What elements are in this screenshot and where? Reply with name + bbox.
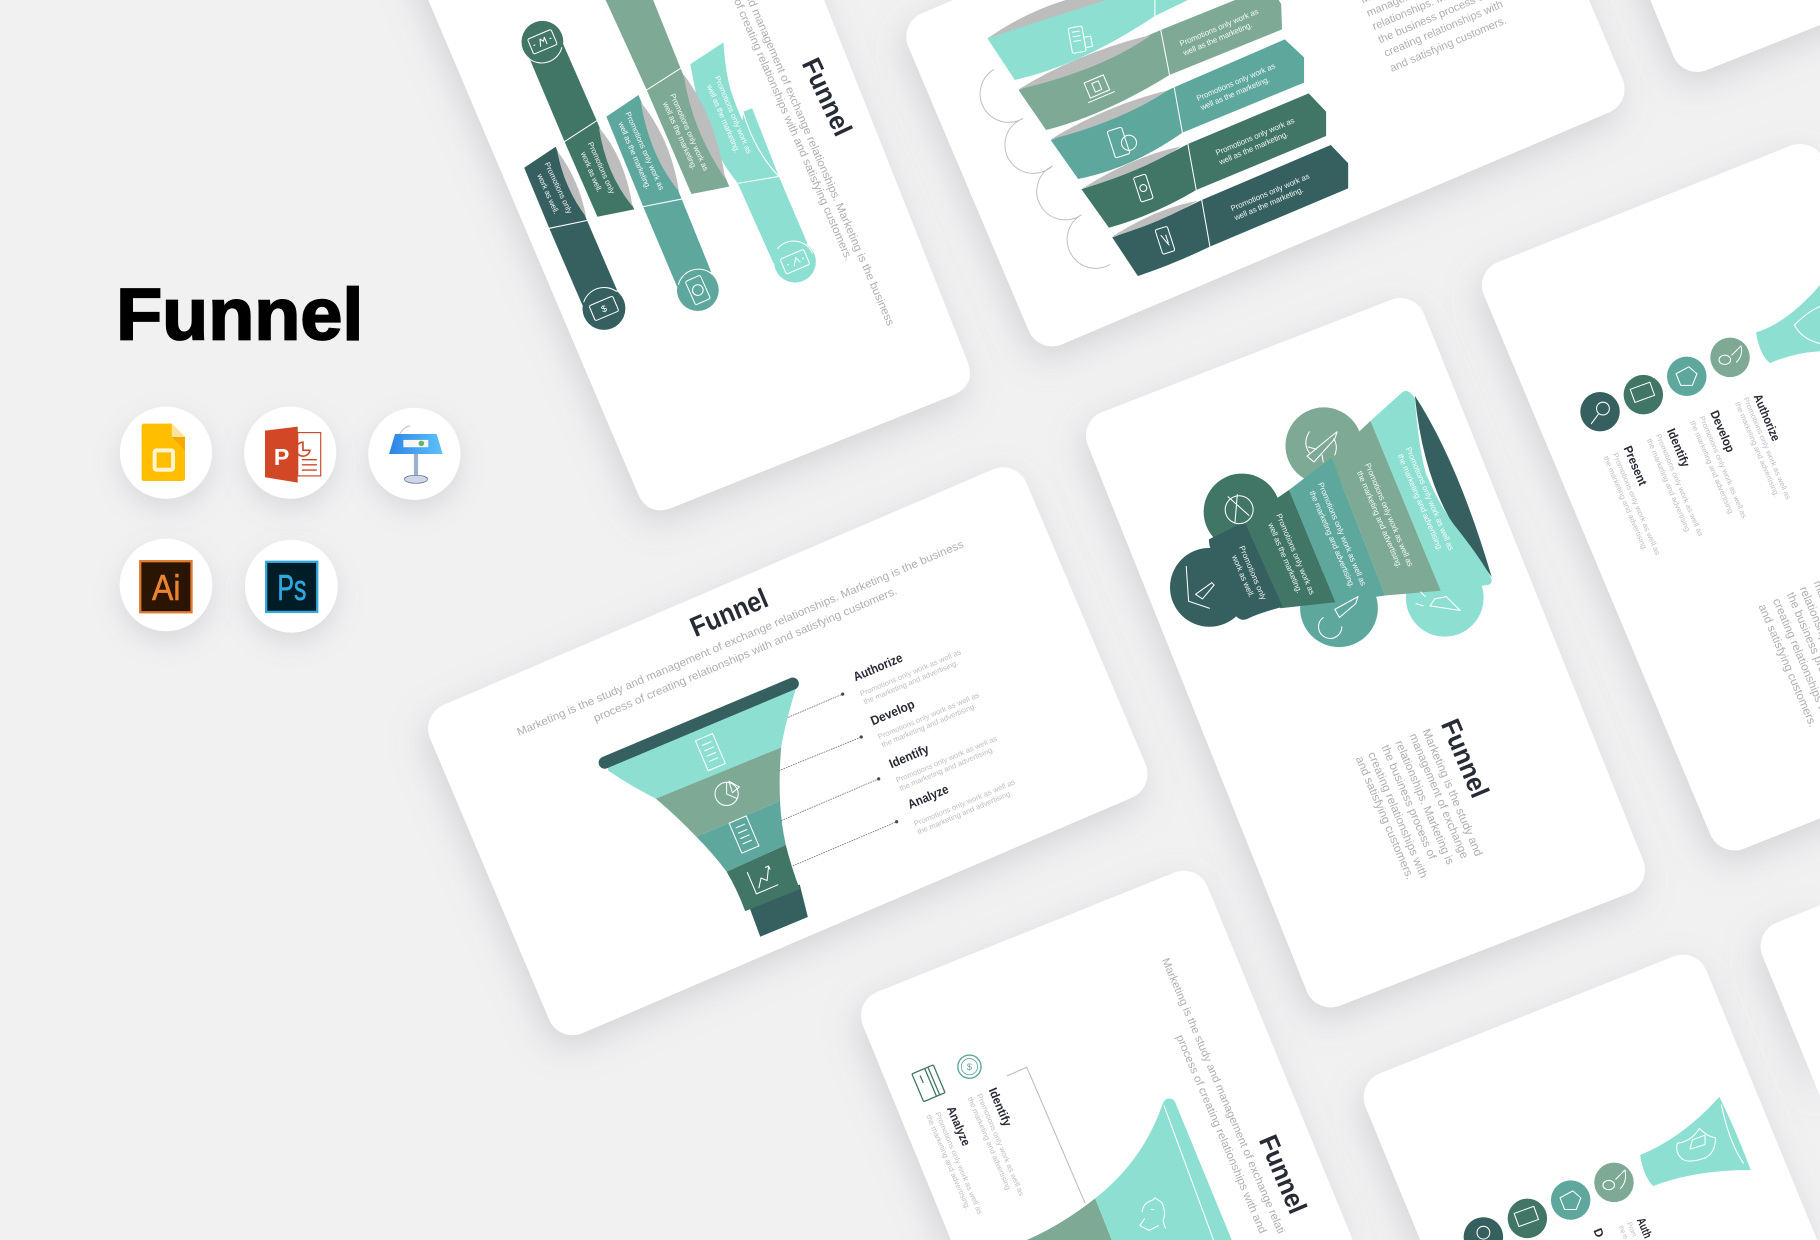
icon: receipt [729, 816, 759, 853]
body text: process of creating relationships with and [1173, 1033, 1268, 1235]
label: Analyze: the marketing and advertising. [916, 788, 1014, 836]
icon: credit card [912, 1065, 945, 1102]
label: Develop: Develop [868, 696, 917, 728]
step circles [1464, 1163, 1634, 1240]
funnel stem [749, 884, 808, 937]
band captions: the marketing and advertising. [1308, 489, 1357, 589]
ribbon captions: Promotions only work as [1214, 116, 1296, 157]
circle: sage [1285, 407, 1362, 484]
body text [1353, 727, 1485, 881]
label: Analyze: Promotions only work as well as [933, 1111, 985, 1216]
band captions: Promotions only work as well as [1404, 446, 1456, 552]
label: Identify: Promotions only work as well as [894, 734, 999, 785]
strip captions: Promotions only work as [668, 92, 710, 172]
label: Identify: the marketing and advertising. [898, 745, 996, 793]
body text: creating relationships with [1365, 750, 1430, 880]
ribbon: darkest [1112, 145, 1348, 276]
card background [898, 0, 1632, 354]
icon: Photoshop [245, 540, 338, 633]
band captions [1230, 446, 1456, 601]
icon: growth chart [747, 863, 778, 894]
icon: coin [958, 1055, 981, 1078]
band captions: Promotions only work as [1274, 512, 1317, 596]
body text [1359, 0, 1508, 75]
funnel mint layer [1095, 1099, 1232, 1240]
circle: teal [1300, 569, 1378, 647]
band: darkest [1209, 522, 1283, 620]
funnel layer 4 [727, 845, 800, 911]
strip captions: work as well. [578, 150, 604, 194]
label: Develop: Promotions only work as well as [877, 690, 981, 741]
ribbon: sage [1019, 0, 1282, 130]
label: Authorize: the marketing and advertising. [1733, 400, 1781, 498]
icon: shield with cart [1677, 1128, 1716, 1161]
scalloped outline [980, 69, 1110, 268]
label: Develop: D [1591, 1226, 1607, 1240]
icon: pie chart [715, 781, 739, 806]
ribbon captions: Promotions only work as [1178, 7, 1260, 48]
icon: PowerPoint [244, 407, 336, 499]
body text: and satisfying customers. [1756, 602, 1819, 729]
sage strip [604, 0, 729, 194]
heading: Funnel [796, 53, 858, 141]
teal strip [606, 95, 719, 311]
card background [1364, 955, 1817, 1240]
icon: Google Slides [120, 407, 212, 499]
label: Analyze: the marketing and advertising. [924, 1113, 972, 1211]
band captions: Promotions only work as well as [1363, 462, 1415, 568]
strip captions: well as the marketing. [705, 82, 742, 154]
connector dots [841, 692, 898, 823]
icon: Illustrator: Ai [152, 567, 180, 608]
intro text: Marketing is the study and management of exchange relationships. Marketing is the business [515, 538, 966, 739]
app icons group [120, 407, 460, 633]
circle: mint [1406, 559, 1484, 637]
ribbon: dark green [1081, 93, 1326, 228]
band captions: Promotions only work as well as [1316, 481, 1368, 587]
funnel tip [1756, 285, 1820, 363]
band captions: the marketing and advertising. [1355, 470, 1404, 569]
dark green strip [522, 21, 634, 217]
label: Present: Present [1621, 444, 1650, 488]
strip captions: Promotions only work as [713, 75, 754, 155]
band: sage [1332, 421, 1441, 595]
ribbon captions: well as the marketing. [1217, 129, 1290, 167]
label: Analyze: Analyze [905, 781, 951, 812]
circle: darkest [1170, 548, 1249, 627]
band captions: work as well. [1230, 553, 1256, 599]
label: Identify: the marketing and advertising. [966, 1096, 1014, 1193]
icon: coin: $ [967, 1062, 972, 1072]
funnel tip [1640, 1097, 1751, 1186]
ribbon captions [1178, 7, 1311, 223]
label: Authorize: the marketing and advertising. [862, 658, 960, 706]
band: dark green [1242, 490, 1335, 608]
band captions: the marketing and advertising. [1396, 453, 1445, 552]
panel: vertical strips funnel card [409, 0, 970, 510]
heading: Funnel [686, 582, 772, 643]
label: Present: Promotions only work as well as [1611, 451, 1662, 557]
card background [1078, 291, 1653, 1015]
darkest strip [524, 147, 625, 330]
ribbon captions: well as the marketing. [1181, 20, 1254, 58]
body text: relationships. Marketing is [1392, 738, 1457, 867]
ribbon: mint [987, 0, 1207, 80]
label: Identify: Identify [887, 741, 932, 771]
label: Develop: the marketing and advertising. [1688, 419, 1736, 517]
heading: Funnel [1253, 1130, 1313, 1218]
rocket icons [1186, 432, 1460, 638]
band captions: Promotions only [1237, 544, 1268, 601]
body text: and satisfying customers. [1388, 15, 1508, 75]
strip captions: well as the marketing. [661, 100, 699, 171]
circle: dark green [1204, 474, 1280, 550]
panel: circles funnel card right [1474, 136, 1820, 858]
step circles [1580, 338, 1750, 431]
icon: PowerPoint: P [274, 444, 289, 470]
label: Identify: Promotions only work as well as [975, 1092, 1026, 1198]
ribbon captions: Promotions only work as [1229, 172, 1311, 213]
panel: far right top card [1551, 0, 1820, 80]
label: Present: the marketing and advertising. [1602, 455, 1650, 552]
funnel sage layer [1027, 1198, 1112, 1240]
panel: classic funnel card [420, 459, 1155, 1043]
icon: Photoshop: Ps [277, 567, 306, 608]
connector lines [779, 694, 897, 866]
funnel inner line [1164, 1106, 1213, 1240]
label: Analyze: Promotions only work as well as [912, 777, 1017, 828]
label: Develop: Develop [1707, 408, 1737, 454]
label: Identify: Identify [986, 1086, 1015, 1129]
page title: Funnel [116, 275, 363, 356]
strip captions: well as the marketing. [616, 120, 653, 190]
body text: and satisfying customers. [1353, 755, 1417, 881]
icon: Keynote [368, 408, 460, 500]
funnel layer 1 [608, 687, 796, 799]
label: Identify: the marketing and advertising. [1645, 437, 1693, 535]
funnel layer 3 [696, 801, 786, 872]
band: mint [1370, 391, 1492, 591]
ribbon captions: well as the marketing. [1232, 185, 1305, 223]
funnel chart [605, 684, 808, 937]
strip captions: Promotions only [543, 161, 574, 215]
body text: management of exchange [1406, 732, 1471, 861]
label: Authorize [1617, 1216, 1655, 1240]
strip captions: Promotions only [586, 141, 617, 195]
funnel inner curve [1721, 1105, 1743, 1163]
body text: creating relationships with [1382, 0, 1505, 60]
intro text: process of creating relationships with and satisfying customers. [592, 585, 899, 725]
body text: Marketing is the study and [1419, 727, 1485, 858]
funnel rim [605, 684, 793, 763]
panel: far right lower card [1761, 905, 1820, 1096]
card background [861, 871, 1353, 1240]
strip captions [535, 75, 754, 215]
label: Analyze: Analyze [944, 1104, 973, 1148]
icon: Illustrator [120, 539, 212, 631]
label: Authorize: Authorize [1751, 392, 1783, 443]
panel: ribbon funnel card [898, 0, 1632, 354]
ribbon captions: well as the marketing. [1198, 75, 1271, 112]
funnel rim shadow shape [1415, 396, 1492, 577]
label: Authorize: Authorize [851, 650, 905, 684]
card background [1474, 136, 1820, 858]
label: Authorize: Promotions only work as well as [859, 647, 963, 698]
label: Identify: Promotions only work as well as [1654, 433, 1705, 538]
band captions: well as the marketing. [1266, 521, 1304, 595]
heading: Funnel [1435, 715, 1495, 802]
panel: curved funnel card bottom [861, 871, 1353, 1240]
body text: the business process of [1379, 743, 1439, 862]
label: Develop: the marketing and advertising. [880, 701, 978, 749]
label: Authorize: Promotions only work as well as [1742, 396, 1793, 501]
connector line [1007, 1067, 1085, 1203]
funnel layer 2 [656, 747, 781, 837]
band: teal [1289, 458, 1385, 602]
strip captions: Promotions only work as [623, 110, 666, 192]
body text: Marketing is the study and management of exchange relati [1159, 956, 1287, 1236]
panel: rocket funnel card [1078, 291, 1653, 1015]
icon: document [695, 734, 725, 771]
ribbon: teal [1051, 39, 1304, 179]
ribbon captions: Promotions only work as [1195, 61, 1277, 103]
mint strip [690, 42, 816, 283]
card background [409, 0, 970, 510]
darkest strip: $ [600, 303, 608, 314]
label: Develop: Promotions only work as well as [1698, 415, 1749, 520]
panel: circles funnel card bottom right [1364, 955, 1817, 1240]
strip captions: work as well. [535, 172, 561, 215]
icon: piggy bank [1140, 1198, 1165, 1230]
icon: shield [1794, 306, 1820, 344]
card background [420, 459, 1155, 1043]
label: Identify: Identify [1664, 426, 1693, 469]
label: Authorize: Prom [1625, 1221, 1639, 1238]
